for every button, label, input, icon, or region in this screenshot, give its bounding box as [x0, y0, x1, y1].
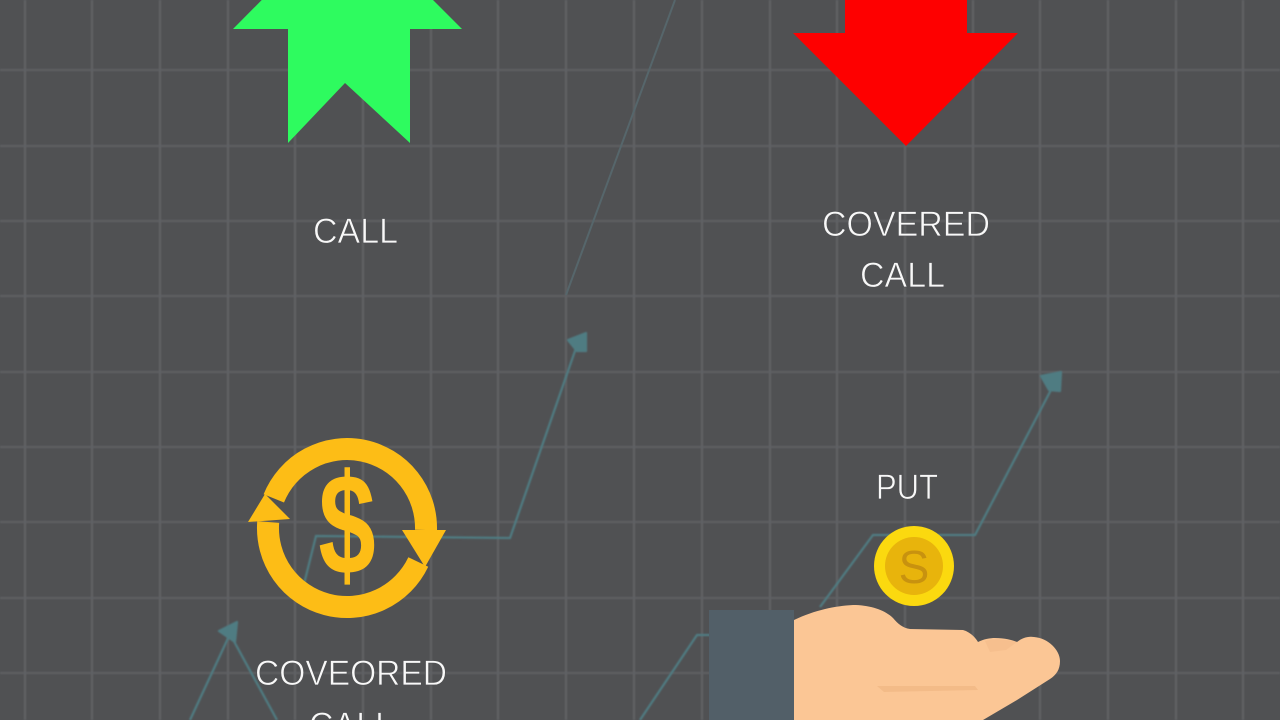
icon: circular dollar arrows: [248, 444, 446, 607]
label: COVERED CALL: [822, 205, 990, 295]
label: PUT: PUT: [876, 468, 938, 507]
label: COVEORED CALL: [255, 654, 447, 720]
chart line: left trend with arrowhead: [190, 333, 586, 720]
icon: red down arrow: [793, 0, 1018, 146]
icon: green up arrow: [233, 0, 462, 143]
chart line: faint upper trend: [566, 0, 675, 295]
icon: gold coin: [874, 526, 954, 606]
label: COVERED CALL: CALL: [860, 256, 945, 295]
icon: circular dollar arrows: $: [318, 444, 376, 605]
label: COVERED CALL: COVERED: [822, 205, 990, 244]
label: COVEORED CALL: COVEORED: [255, 654, 447, 693]
icon: gold coin: S: [899, 541, 929, 593]
chart line: right trend with arrowhead: [640, 372, 1061, 720]
label: CALL: CALL: [313, 212, 398, 251]
icon: open hand with sleeve: [709, 605, 1060, 720]
